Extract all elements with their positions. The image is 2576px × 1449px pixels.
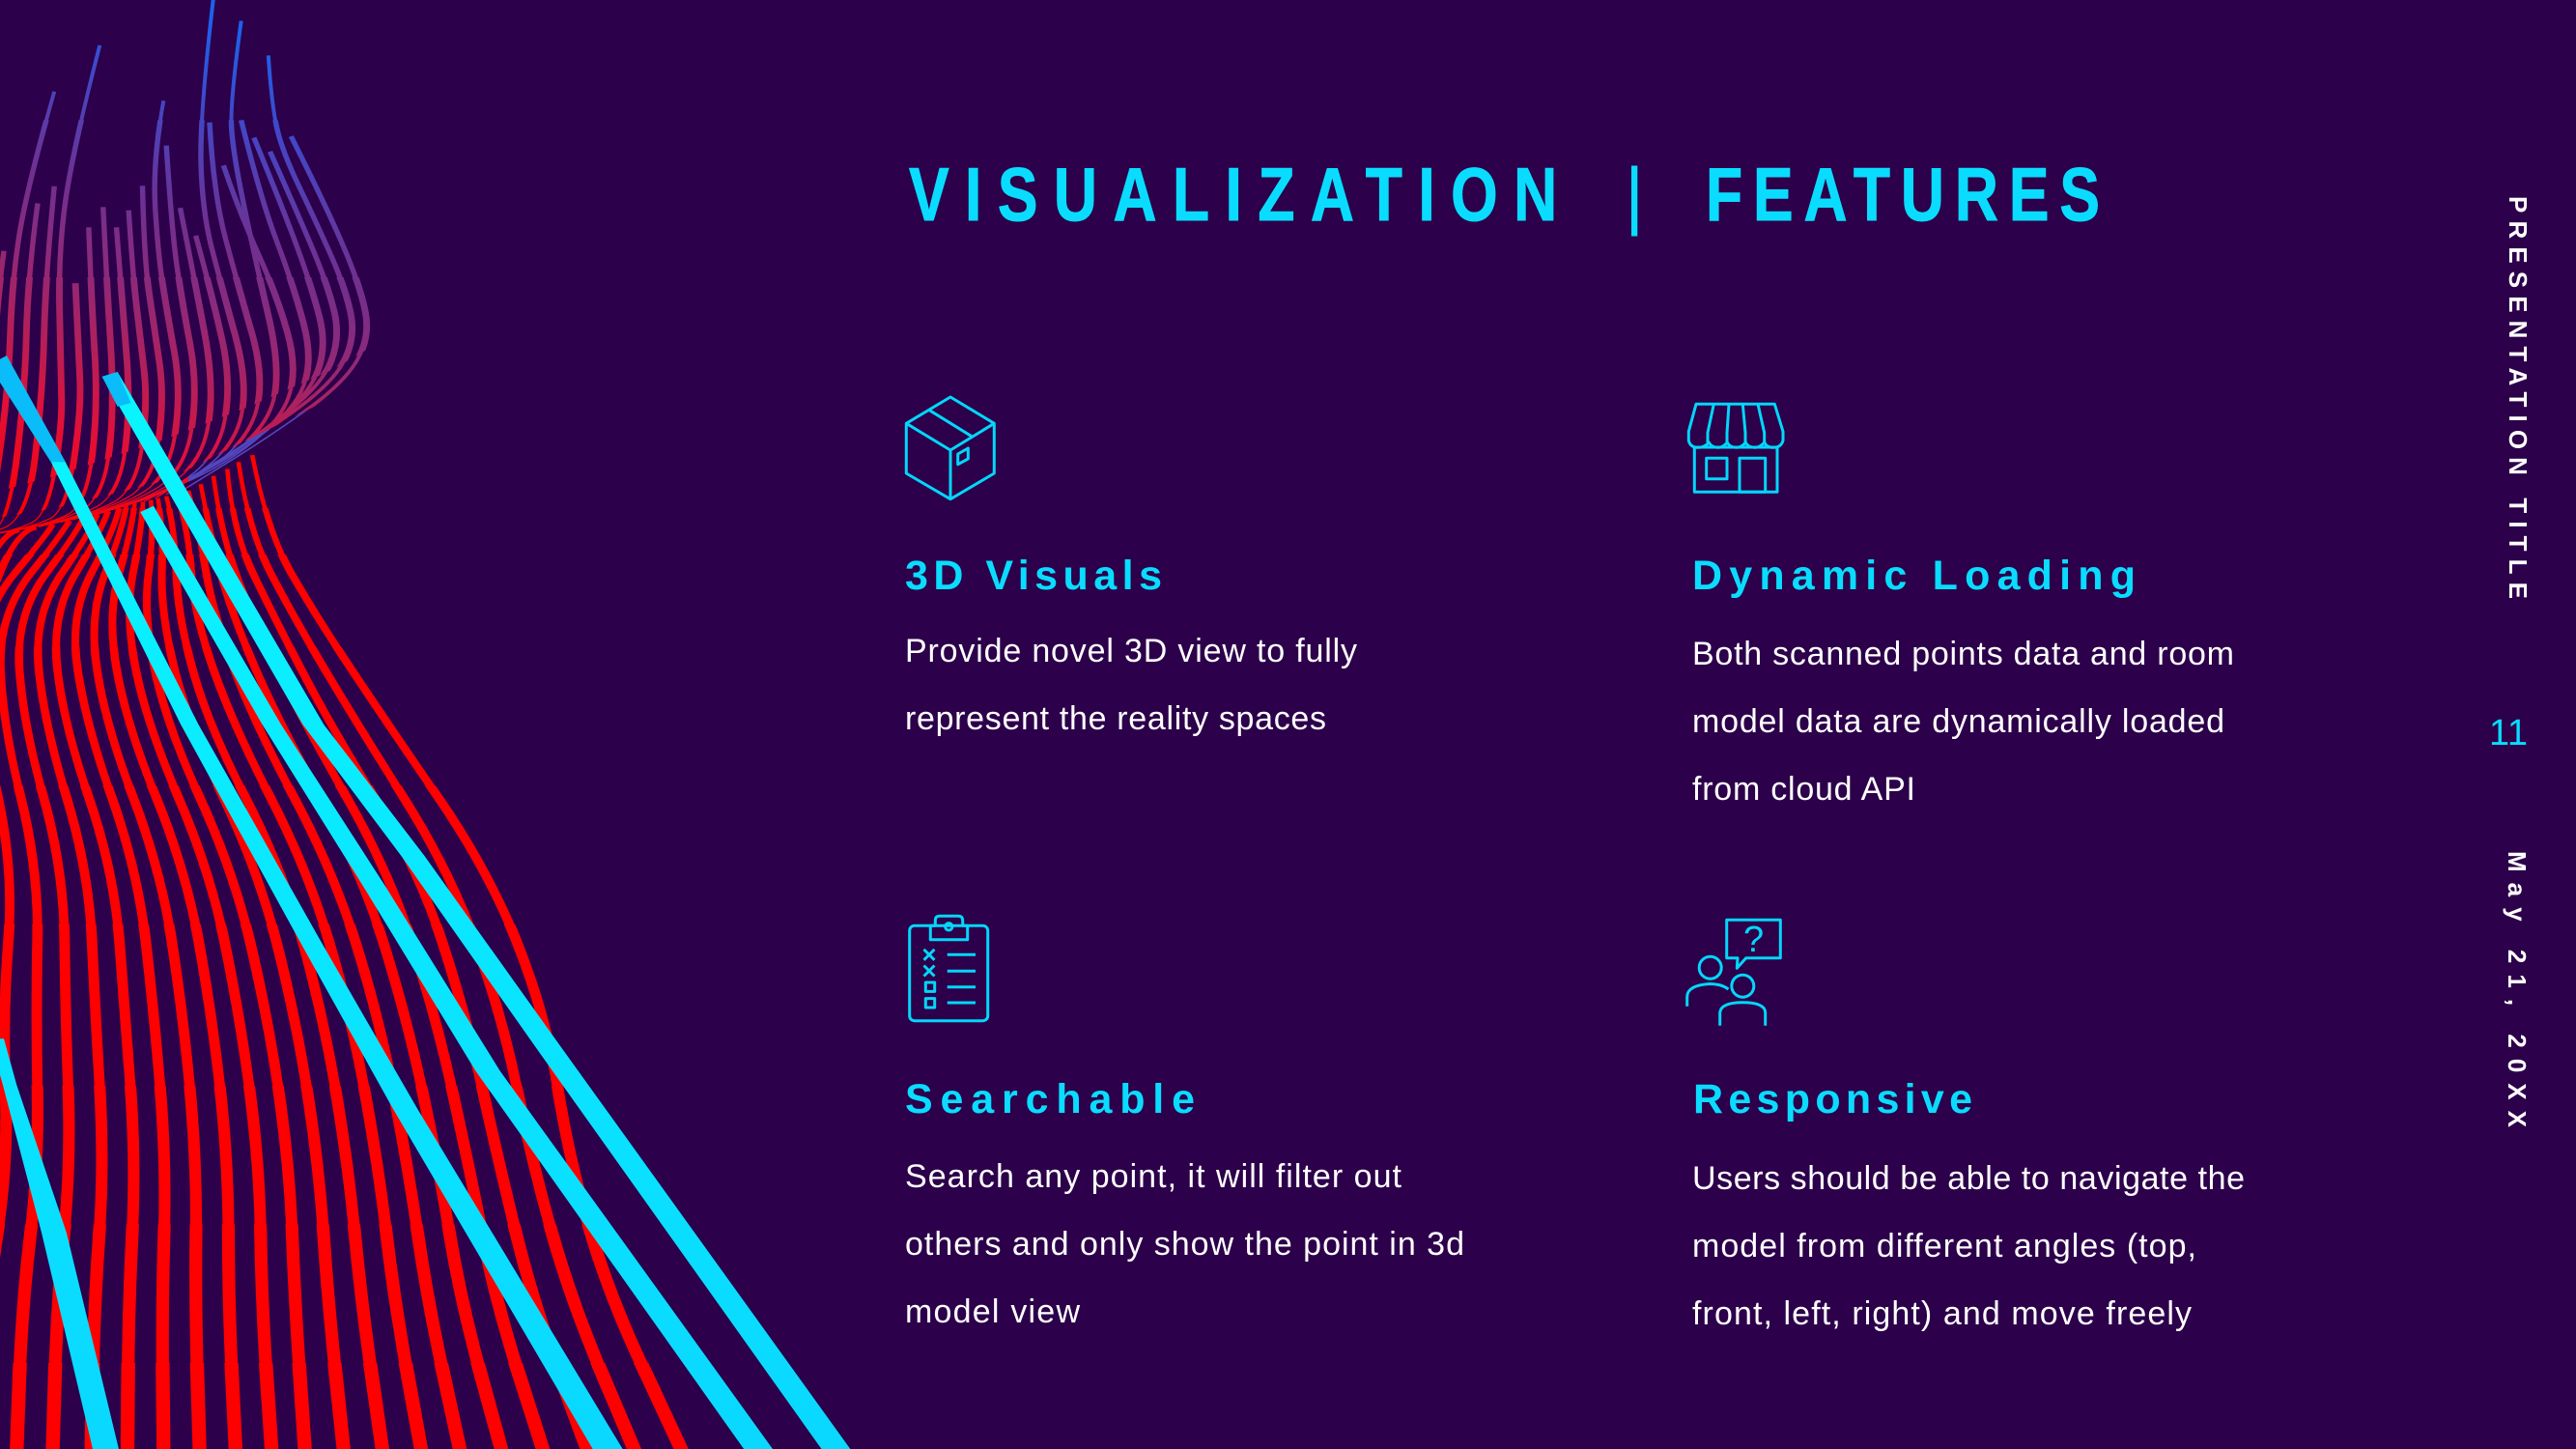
icon: storefront bbox=[1688, 404, 1783, 492]
icon: people with question bubble bbox=[1687, 920, 1780, 1026]
heading: 3D Visuals bbox=[905, 553, 1162, 599]
text block: front, left, right) and move freely bbox=[1692, 1295, 2192, 1332]
panel: 3D Visuals bbox=[905, 397, 1357, 737]
text block: Search any point, it will filter out bbox=[905, 1158, 1402, 1195]
text block: model data are dynamically loaded bbox=[1692, 703, 2224, 740]
wave graphic: ribbon lines and cyan diagonal bars bbox=[0, 0, 852, 1449]
text block: model from different angles (top, bbox=[1692, 1228, 2196, 1264]
title: | bbox=[1625, 152, 1644, 237]
title: VISUALIZATION bbox=[909, 152, 1557, 237]
panel: Responsive bbox=[1687, 920, 2245, 1332]
title bbox=[909, 152, 2100, 237]
lower ribbon lines: red bbox=[0, 455, 682, 1449]
cyan diagonal bars bbox=[0, 355, 852, 1449]
sidebar: page number: 11 bbox=[2489, 713, 2528, 753]
text block: model view bbox=[905, 1293, 1080, 1330]
heading: Dynamic Loading bbox=[1692, 553, 2136, 599]
icon: clipboard checklist bbox=[910, 916, 988, 1021]
panel: Searchable bbox=[905, 916, 1464, 1330]
upper ribbon lines: blue to purple fade bbox=[0, 0, 367, 537]
text block: Users should be able to navigate the bbox=[1692, 1160, 2245, 1197]
text block: Both scanned points data and room bbox=[1692, 636, 2234, 672]
text block bbox=[1692, 636, 2234, 808]
text block: others and only show the point in 3d bbox=[905, 1226, 1464, 1263]
sidebar: presentation title: PRESENTATION TITLE bbox=[2504, 196, 2533, 599]
heading: Searchable bbox=[905, 1076, 1195, 1122]
text block: represent the reality spaces bbox=[905, 700, 1326, 737]
text block bbox=[905, 633, 1357, 737]
text block: from cloud API bbox=[1692, 771, 1915, 808]
icon: box bbox=[906, 397, 994, 499]
title: FEATURES bbox=[1706, 152, 2100, 237]
panel: Dynamic Loading bbox=[1688, 404, 2234, 808]
icon: people with question bubble: ? bbox=[1743, 920, 1764, 960]
text block bbox=[905, 1158, 1464, 1330]
text block: Provide novel 3D view to fully bbox=[905, 633, 1357, 669]
text block bbox=[1692, 1160, 2245, 1332]
heading: Responsive bbox=[1693, 1076, 1972, 1122]
sidebar: date: May 21, 20XX bbox=[2503, 851, 2532, 1128]
